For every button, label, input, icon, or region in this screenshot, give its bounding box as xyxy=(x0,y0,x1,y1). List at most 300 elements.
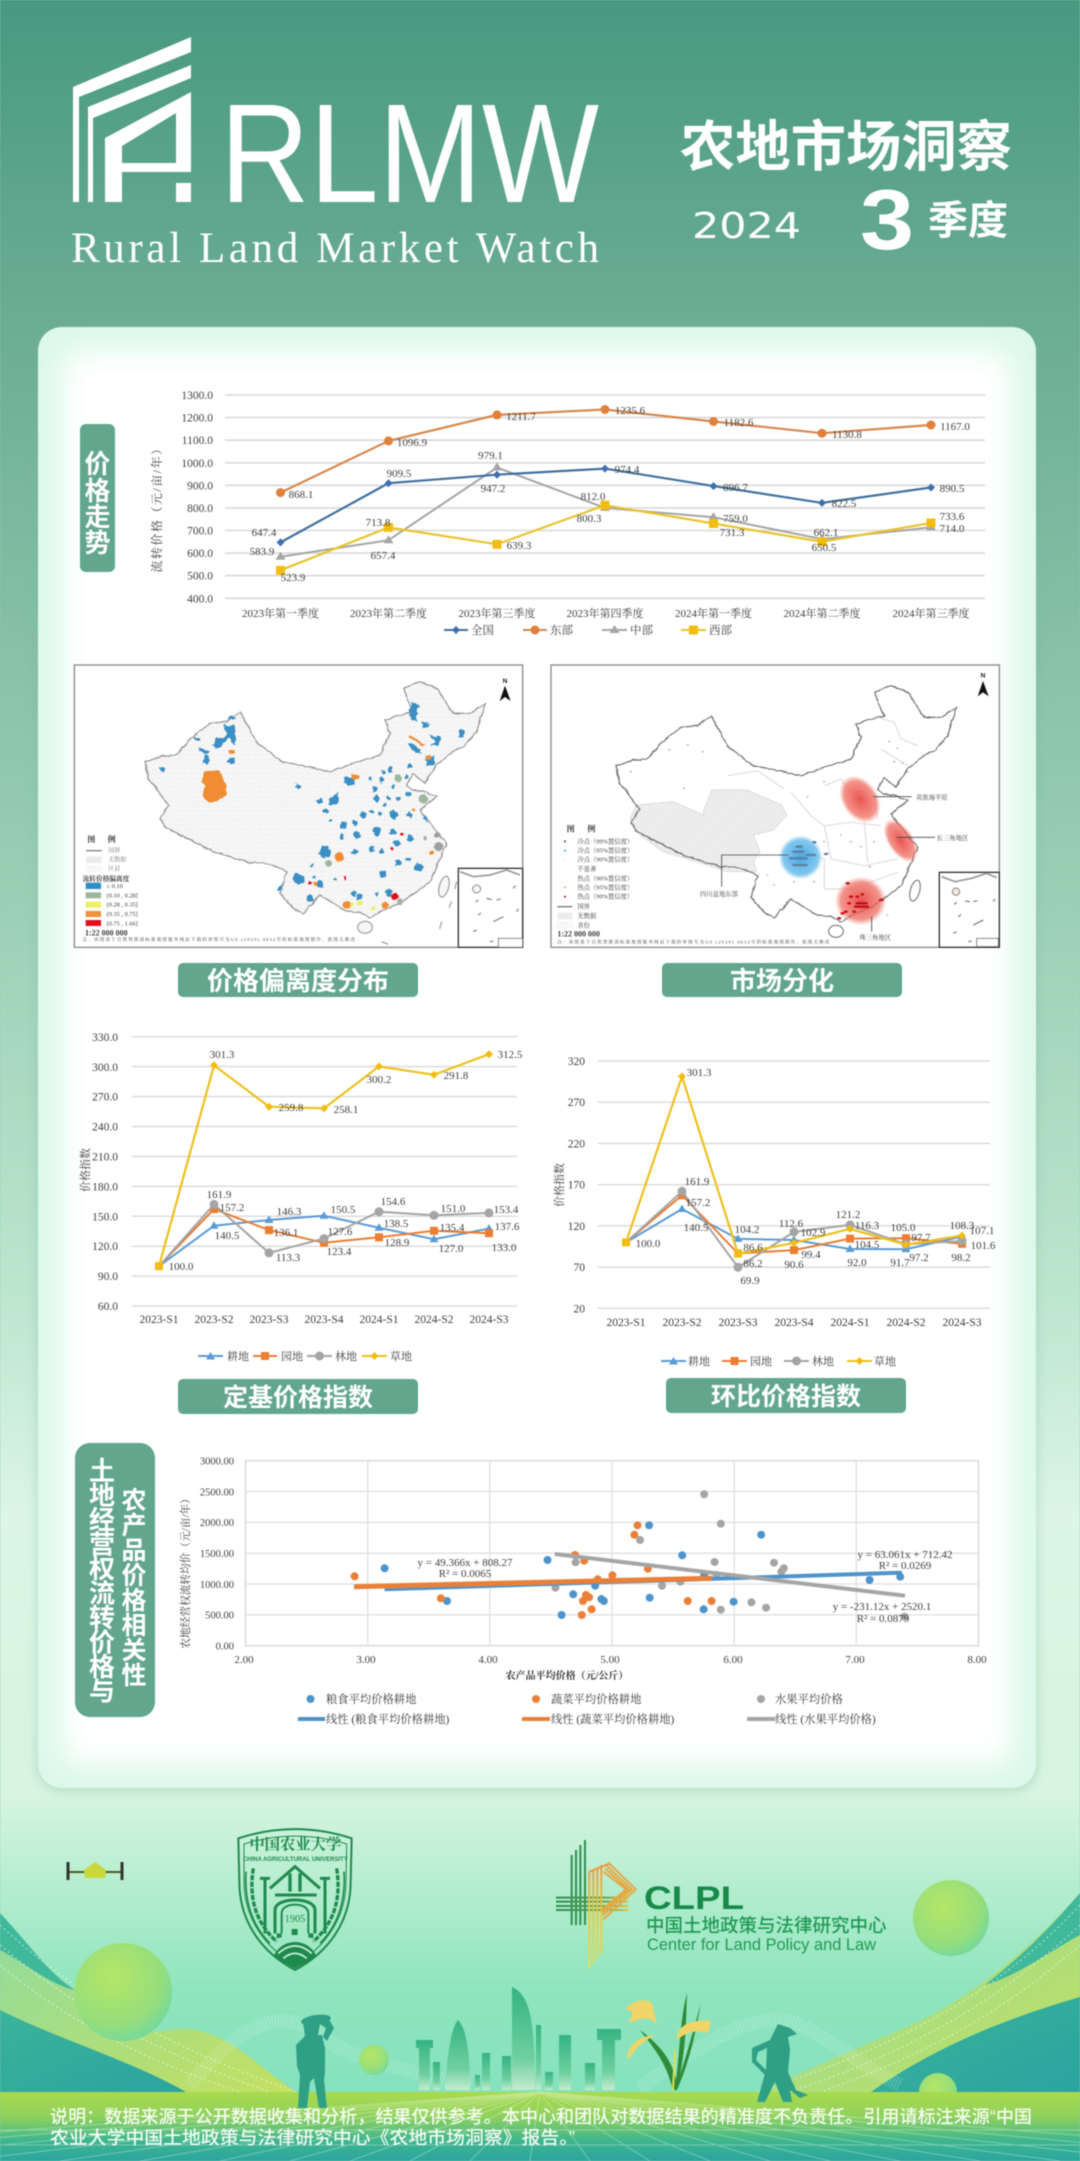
y axis labels: 300.0 xyxy=(92,1062,118,1074)
legend: 蔬菜平均价格耕地 xyxy=(551,1692,641,1706)
footer: faint dotted hills xyxy=(190,2020,900,2088)
data labels: 979.1 xyxy=(478,450,503,462)
y axis labels: 270.0 xyxy=(92,1092,118,1104)
data labels: 1167.0 xyxy=(940,421,970,433)
trend equations: y = 49.366x + 808.27 xyxy=(418,1557,513,1569)
series: 园地 xyxy=(159,1205,493,1266)
section label: 价格偏离度分布: 价格偏离度分布 xyxy=(207,966,389,996)
data labels: 98.2 xyxy=(951,1252,971,1264)
north arrow xyxy=(978,673,989,696)
x axis labels: 2023-S2 xyxy=(195,1314,234,1326)
map legend: 图 xyxy=(567,823,575,834)
x axis labels: 2024-S1 xyxy=(360,1314,399,1326)
y axis labels: 1000.00 xyxy=(200,1580,234,1591)
line chart: chain price index xyxy=(552,1056,996,1368)
x axis labels xyxy=(607,1317,982,1329)
data labels: 662.1 xyxy=(814,527,838,539)
axis titles: 农地经营权流转均价（元/亩/年） xyxy=(179,1493,192,1649)
legend: 园地 xyxy=(281,1349,303,1363)
map legend: (0.10 , 0.28] xyxy=(107,892,138,899)
data labels: 523.9 xyxy=(281,572,306,584)
data labels: 259.8 xyxy=(279,1102,304,1114)
trend equations: R² = 0.0269 xyxy=(879,1560,932,1572)
y axis labels: 2500.00 xyxy=(200,1488,234,1498)
map legend: 图 xyxy=(87,834,95,845)
data labels: 154.6 xyxy=(381,1196,406,1208)
y axis labels: 500.00 xyxy=(205,1610,234,1622)
data labels: 1130.8 xyxy=(832,429,862,441)
x axis labels: 4.00 xyxy=(478,1654,498,1666)
map legend xyxy=(557,823,830,945)
trend lines xyxy=(354,1554,905,1596)
data labels: 812.0 xyxy=(581,491,606,503)
legend xyxy=(298,1692,876,1726)
data labels: 108.3 xyxy=(950,1220,975,1232)
footer: ground with perspective grid xyxy=(0,2092,1080,2161)
x axis labels: 2024-S2 xyxy=(415,1314,454,1326)
map legend: 例 xyxy=(587,823,595,834)
data labels xyxy=(250,405,970,584)
legend: 林地 xyxy=(335,1349,357,1363)
main panel xyxy=(38,327,1036,1790)
footer: rice plant xyxy=(625,1993,711,2090)
data labels: 91.7 xyxy=(890,1257,910,1269)
deviation patches: other classes xyxy=(308,774,443,911)
section label: 市场分化 xyxy=(662,963,902,997)
legend xyxy=(661,1354,896,1368)
data labels: 150.5 xyxy=(331,1204,356,1216)
data labels: 104.5 xyxy=(855,1239,880,1251)
y axis labels: 20 xyxy=(574,1303,585,1315)
map legend: 冷点（95%置信度） xyxy=(577,846,633,855)
data labels: 127.6 xyxy=(328,1226,353,1238)
map legend: 区县 xyxy=(108,865,120,873)
cold spot: 四川盆地东部 xyxy=(779,835,823,879)
data labels: 112.6 xyxy=(779,1218,804,1230)
x axis labels: 2023-S4 xyxy=(775,1317,814,1329)
trend equations: R² = 0.0879 xyxy=(857,1613,910,1625)
x axis labels: 8.00 xyxy=(967,1654,987,1666)
series: 林地 xyxy=(159,1200,494,1266)
x axis labels: 2024年第二季度 xyxy=(784,606,860,620)
series: 园地 xyxy=(626,1191,966,1257)
legend xyxy=(444,623,732,637)
trend equations: y = -231.12x + 2520.1 xyxy=(833,1601,931,1613)
data labels: 157.2 xyxy=(220,1202,244,1214)
footer: disclaimer note: 农业大学中国土地政策与法律研究中心《农地市场洞察》报告。” xyxy=(50,2127,575,2148)
legend: 线性 (粮食平均价格耕地) xyxy=(326,1712,450,1726)
callout labels: 长三角地区 xyxy=(937,833,969,842)
hot spot: 长三角地区 xyxy=(877,814,924,868)
map legend: (0.35 , 0.75] xyxy=(107,911,138,918)
data labels: 101.6 xyxy=(971,1240,996,1252)
y axis labels: 90.0 xyxy=(98,1271,118,1283)
map legend: 热点（99%置信度） xyxy=(577,892,633,901)
x axis labels: 5.00 xyxy=(600,1654,620,1666)
data labels: 140.5 xyxy=(684,1222,709,1234)
map legend: 无数据 xyxy=(108,856,126,864)
data labels: 583.9 xyxy=(250,546,275,558)
legend xyxy=(198,1349,412,1363)
data labels: 133.0 xyxy=(492,1242,517,1254)
data labels: 116.3 xyxy=(855,1220,880,1232)
scattered insignificant points xyxy=(630,742,908,915)
y axis labels: 1500.00 xyxy=(200,1549,234,1560)
series: 东部 xyxy=(276,405,936,497)
data labels: 1211.7 xyxy=(506,411,536,423)
footer: center english name: Center for Land Policy and Law xyxy=(647,1935,877,1954)
data labels: 86.6 xyxy=(743,1242,763,1254)
y axis labels: 600.0 xyxy=(187,548,213,560)
y axis labels: 2000.00 xyxy=(200,1518,234,1529)
x axis labels: 2024年第一季度 xyxy=(675,606,752,620)
y axis labels: 330.0 xyxy=(92,1032,118,1044)
data labels: 731.3 xyxy=(720,527,745,539)
legend: 草地 xyxy=(390,1349,412,1363)
deviation patches: blue xyxy=(160,702,465,902)
x axis labels: 6.00 xyxy=(723,1654,743,1666)
map: market differentiation xyxy=(551,665,999,947)
map legend xyxy=(83,834,355,943)
data labels: 301.3 xyxy=(210,1049,235,1061)
side label: 土地经营权流转价格与农产品价格相关性: 农产品价格相关性 xyxy=(121,1487,147,1690)
china outline with counties xyxy=(145,682,485,918)
map legend: 无数据 xyxy=(577,911,597,920)
map legend: 流转价格偏离度 xyxy=(83,874,130,883)
map legend: ≤ 0.10 xyxy=(107,883,123,890)
data labels: 97.2 xyxy=(909,1252,929,1264)
north arrow: N xyxy=(981,673,986,680)
y axis labels: 3000.00 xyxy=(200,1456,234,1468)
y axis labels: 180.0 xyxy=(92,1181,118,1193)
map legend: 注：该图基于自然资源部标准地图服务网站下载的审图号为GS (2020) 4632号的标准地图制作，底图无修改 xyxy=(557,938,830,945)
data labels: 127.0 xyxy=(439,1243,464,1255)
footer: wave decoration right xyxy=(757,1893,1080,2092)
footer: drone icon xyxy=(68,1862,122,1880)
scatter chart: price correlation xyxy=(179,1456,987,1726)
data labels: 657.4 xyxy=(371,550,396,562)
map legend: 国界 xyxy=(108,847,120,855)
data labels: 759.0 xyxy=(723,513,748,525)
data labels: 947.2 xyxy=(481,483,505,495)
data labels: 300.2 xyxy=(367,1074,391,1086)
callout labels: 黄淮海平原 xyxy=(916,792,948,801)
north arrow: N xyxy=(503,678,508,685)
university name: 中国农业大学 xyxy=(249,1832,341,1854)
x axis labels: 2023年第四季度 xyxy=(566,606,644,620)
data labels: 733.6 xyxy=(940,511,965,523)
footer: decorative green spheres xyxy=(74,1880,989,2161)
red hot points xyxy=(838,883,883,918)
data labels: 301.3 xyxy=(687,1067,712,1079)
x axis labels: 2023-S3 xyxy=(719,1317,758,1329)
legend: 耕地 xyxy=(688,1354,710,1368)
y axis labels: 1100.0 xyxy=(182,435,213,447)
footer: city skyline xyxy=(416,1987,621,2090)
y axis title: 价格指数 xyxy=(78,1148,92,1192)
north arrow xyxy=(500,678,511,701)
y axis labels: 150.0 xyxy=(92,1211,118,1223)
legend: 全国 xyxy=(471,623,494,637)
y axis labels xyxy=(181,390,213,605)
map legend: 1:22 000 000 xyxy=(85,928,128,937)
data labels xyxy=(636,1067,996,1287)
map: price deviation distribution xyxy=(74,665,523,947)
y axis labels: 120.0 xyxy=(92,1241,118,1253)
hot spot: 珠三角地区 xyxy=(835,877,886,925)
data labels: 136.1 xyxy=(274,1227,298,1239)
data labels: 140.5 xyxy=(215,1230,240,1242)
data labels: 312.5 xyxy=(498,1049,523,1061)
section label: 环比价格指数: 环比价格指数 xyxy=(711,1383,861,1411)
header: quarter 3 季度: 季度 xyxy=(928,199,1008,243)
series: 耕地 xyxy=(626,1204,966,1252)
x axis labels: 2023-S2 xyxy=(663,1317,702,1329)
header: RLMW wordmark: RLMW xyxy=(220,74,599,232)
x axis labels: 2024-S1 xyxy=(831,1317,870,1329)
x axis labels: 2023-S1 xyxy=(140,1314,179,1326)
side label: 土地经营权流转价格与农产品价格相关性 xyxy=(75,1443,155,1717)
y axis labels: 60.0 xyxy=(98,1301,118,1313)
map legend: (0.28 , 0.35] xyxy=(107,902,138,909)
data labels: 822.5 xyxy=(832,498,857,510)
data labels: 121.2 xyxy=(836,1209,860,1221)
y axis labels: 120 xyxy=(568,1221,585,1233)
points: 粮食 xyxy=(381,1521,904,1619)
data labels: 1096.9 xyxy=(397,437,428,449)
y axis labels: 700.0 xyxy=(187,526,213,538)
header: title 农地市场洞察: 农地市场洞察 xyxy=(680,116,1012,178)
data labels: 151.0 xyxy=(441,1203,466,1215)
data labels: 100.0 xyxy=(636,1238,661,1250)
x axis labels: 2023年第三季度 xyxy=(458,606,536,620)
footer: center chinese name: 中国土地政策与法律研究中心 xyxy=(646,1915,887,1936)
series: 西部 xyxy=(276,501,936,575)
data labels: 128.9 xyxy=(385,1237,410,1249)
side label: 土地经营权流转价格与农产品价格相关性: 土地经营权流转价格与 xyxy=(89,1456,115,1706)
y axis labels: 270 xyxy=(568,1097,585,1109)
x axis labels: 2023-S4 xyxy=(305,1314,344,1326)
legend: 线性 (水果平均价格) xyxy=(775,1712,876,1726)
y axis labels: 240.0 xyxy=(92,1122,118,1134)
data labels: 107.1 xyxy=(970,1225,994,1237)
section label: 定基价格指数 xyxy=(178,1379,418,1414)
y axis labels xyxy=(92,1032,118,1313)
data labels: 146.3 xyxy=(277,1206,302,1218)
gear xyxy=(273,1942,317,1969)
header: quarter 3 季度: 3 xyxy=(860,173,914,268)
y axis labels: 900.0 xyxy=(187,480,213,492)
data labels: 639.3 xyxy=(507,540,532,552)
data labels: 113.3 xyxy=(276,1252,301,1264)
map legend: 例 xyxy=(108,834,116,845)
data labels: 714.0 xyxy=(940,523,965,535)
y axis labels: 0.00 xyxy=(216,1642,234,1652)
axis titles: 农产品平均价格（元/公斤） xyxy=(505,1669,628,1682)
y axis labels: 500.0 xyxy=(187,571,213,583)
data labels: 1235.6 xyxy=(615,405,646,417)
data labels: 69.9 xyxy=(740,1275,760,1287)
footer: disclaimer note: 说明：数据来源于公开数据收集和分析，结果仅供参考。本中心和团队对数据结果的精准度不负责任。引用请标注来源“中国 xyxy=(50,2107,1032,2127)
x axis labels: 3.00 xyxy=(356,1654,376,1666)
map legend: 冷点（99%置信度） xyxy=(577,837,633,846)
legend: 东部 xyxy=(550,624,573,637)
data labels: 157.2 xyxy=(686,1197,710,1209)
legend: 耕地 xyxy=(227,1349,249,1363)
line chart: price trend xyxy=(149,390,985,637)
footer: China Agricultural University logo xyxy=(238,1829,352,1970)
series: 草地 xyxy=(155,1050,493,1270)
x axis labels: 2023-S3 xyxy=(250,1314,289,1326)
x axis labels xyxy=(234,1654,987,1666)
data labels: 291.8 xyxy=(444,1070,469,1082)
callout labels: 四川盆地东部 xyxy=(700,889,739,898)
data labels: 890.5 xyxy=(940,483,965,495)
data labels: 100.0 xyxy=(169,1261,194,1273)
points: 蔬菜 xyxy=(351,1521,716,1619)
map legend: 冷点（90%置信度） xyxy=(577,855,633,864)
footer: farmer silhouette left xyxy=(296,2013,334,2108)
legend: 林地 xyxy=(812,1354,834,1368)
series: 林地 xyxy=(626,1187,966,1272)
english name: CHINA AGRICULTURAL UNIVERSITY xyxy=(243,1856,348,1863)
trend equations xyxy=(418,1549,952,1625)
y axis title: 价格指数 xyxy=(552,1163,566,1207)
inset map xyxy=(939,872,999,947)
footer: CLPL name: CLPL xyxy=(644,1880,744,1916)
map legend: 国界 xyxy=(577,902,591,911)
y axis title: 流转价格（元/亩/年） xyxy=(149,441,164,573)
data labels: 90.6 xyxy=(784,1259,804,1271)
islands xyxy=(358,875,457,944)
data labels: 135.4 xyxy=(440,1222,465,1234)
map legend: 注：该图基于自然资源部标准地图服务网站下载的审图号为GS (2020) 4632号的标准地图制作，底图无修改 xyxy=(83,936,355,943)
map legend: 热点（95%置信度） xyxy=(577,882,633,891)
y axis labels xyxy=(568,1056,585,1315)
axis titles xyxy=(179,1493,628,1682)
y axis labels: 70 xyxy=(574,1262,585,1274)
data labels: 102.9 xyxy=(801,1227,826,1239)
data labels: 99.4 xyxy=(801,1249,821,1261)
y axis labels: 220 xyxy=(568,1138,585,1150)
data labels: 868.1 xyxy=(289,489,313,501)
data labels: 1182.6 xyxy=(724,417,754,429)
header: year 2024: 2024 xyxy=(692,206,801,247)
series: 草地 xyxy=(622,1072,966,1258)
y axis labels: 170 xyxy=(568,1180,585,1192)
section label: 市场分化: 市场分化 xyxy=(730,966,834,996)
data labels: 161.9 xyxy=(207,1189,232,1201)
callout labels: 珠三角地区 xyxy=(859,933,892,942)
callout lines xyxy=(722,797,935,932)
x axis labels: 2024-S2 xyxy=(887,1317,926,1329)
map legend: 不显著 xyxy=(577,864,597,873)
no-data hatched provinces xyxy=(630,790,787,872)
data labels: 92.0 xyxy=(847,1257,867,1269)
legend: 线性 (蔬菜平均价格耕地) xyxy=(551,1712,675,1726)
y axis labels: 1000.0 xyxy=(181,458,213,470)
data labels: 800.3 xyxy=(577,513,602,525)
section label: 定基价格指数: 定基价格指数 xyxy=(223,1384,373,1412)
data labels: 86.2 xyxy=(743,1258,763,1270)
legend: 粮食平均价格耕地 xyxy=(326,1692,416,1706)
legend: 水果平均价格 xyxy=(775,1692,843,1706)
header: quarter 3 季度 xyxy=(860,173,1008,268)
data labels: 97.7 xyxy=(911,1232,931,1244)
y axis labels: 1300.0 xyxy=(181,390,213,402)
y axis labels: 320 xyxy=(568,1056,585,1068)
inset map xyxy=(458,868,523,947)
x axis labels: 2024-S3 xyxy=(943,1317,982,1329)
legend: 西部 xyxy=(709,624,732,637)
legend: 中部 xyxy=(630,623,653,637)
y axis labels: 1200.0 xyxy=(181,413,213,425)
footer: CLPL logo mark xyxy=(556,1840,636,1968)
data labels: 974.4 xyxy=(615,464,640,476)
gate emblem xyxy=(260,1867,330,1933)
y axis labels: 400.0 xyxy=(187,593,213,605)
data labels: 104.2 xyxy=(735,1224,759,1236)
trend equations: y = 63.061x + 712.42 xyxy=(858,1549,952,1561)
side label: 价格走势: 价格走势 xyxy=(84,449,111,558)
x axis labels: 2023年第一季度 xyxy=(242,606,319,620)
data labels: 713.8 xyxy=(366,517,391,529)
series: 耕地 xyxy=(159,1211,494,1266)
data labels: 896.7 xyxy=(723,482,748,494)
x axis labels: 2024-S3 xyxy=(470,1314,509,1326)
x axis labels xyxy=(242,606,970,620)
legend: 园地 xyxy=(750,1354,772,1368)
trend equations: R² = 0.0065 xyxy=(439,1568,492,1580)
footer: wave decoration left xyxy=(0,1913,296,2092)
series: 中部 xyxy=(276,462,936,560)
data labels: 258.1 xyxy=(334,1104,358,1116)
map legend: 热点（90%置信度） xyxy=(577,873,633,882)
y axis labels: 210.0 xyxy=(92,1151,118,1163)
data labels: 105.0 xyxy=(891,1222,916,1234)
side label: 价格走势 xyxy=(80,424,115,572)
data labels: 137.6 xyxy=(495,1221,520,1233)
data labels xyxy=(169,1049,523,1273)
y axis labels xyxy=(200,1456,234,1652)
legend: 草地 xyxy=(874,1354,896,1368)
x axis labels xyxy=(140,1314,509,1326)
data labels: 138.5 xyxy=(384,1218,409,1230)
map legend: 1:22 000 000 xyxy=(557,929,600,938)
data labels: 123.4 xyxy=(327,1246,352,1258)
line chart: fixed-base price index xyxy=(78,1032,523,1363)
x axis labels: 2024年第三季度 xyxy=(892,606,970,620)
wheat ears xyxy=(246,1868,344,1943)
data labels: 647.4 xyxy=(252,527,277,539)
map legend: (0.75 , 1.66] xyxy=(107,920,138,927)
significant points xyxy=(790,842,827,865)
data labels: 153.4 xyxy=(494,1204,519,1216)
header: Rural Land Market Watch: Rural Land Market Watch xyxy=(71,225,599,272)
section label: 环比价格指数 xyxy=(666,1378,906,1413)
hot spot: 黄淮海平原 xyxy=(831,768,889,830)
series: 全国 xyxy=(276,465,935,546)
deviation patches: orange xyxy=(202,735,434,909)
china outline with provinces xyxy=(616,686,956,937)
footer: disclaimer note xyxy=(50,2107,1032,2148)
callout labels xyxy=(700,792,969,942)
data labels: 909.5 xyxy=(387,468,412,480)
data labels: 161.9 xyxy=(685,1176,710,1188)
founding year: 1905 xyxy=(285,1914,305,1925)
x axis labels: 2023-S1 xyxy=(607,1317,646,1329)
footer: farmer silhouette right xyxy=(752,2024,808,2102)
